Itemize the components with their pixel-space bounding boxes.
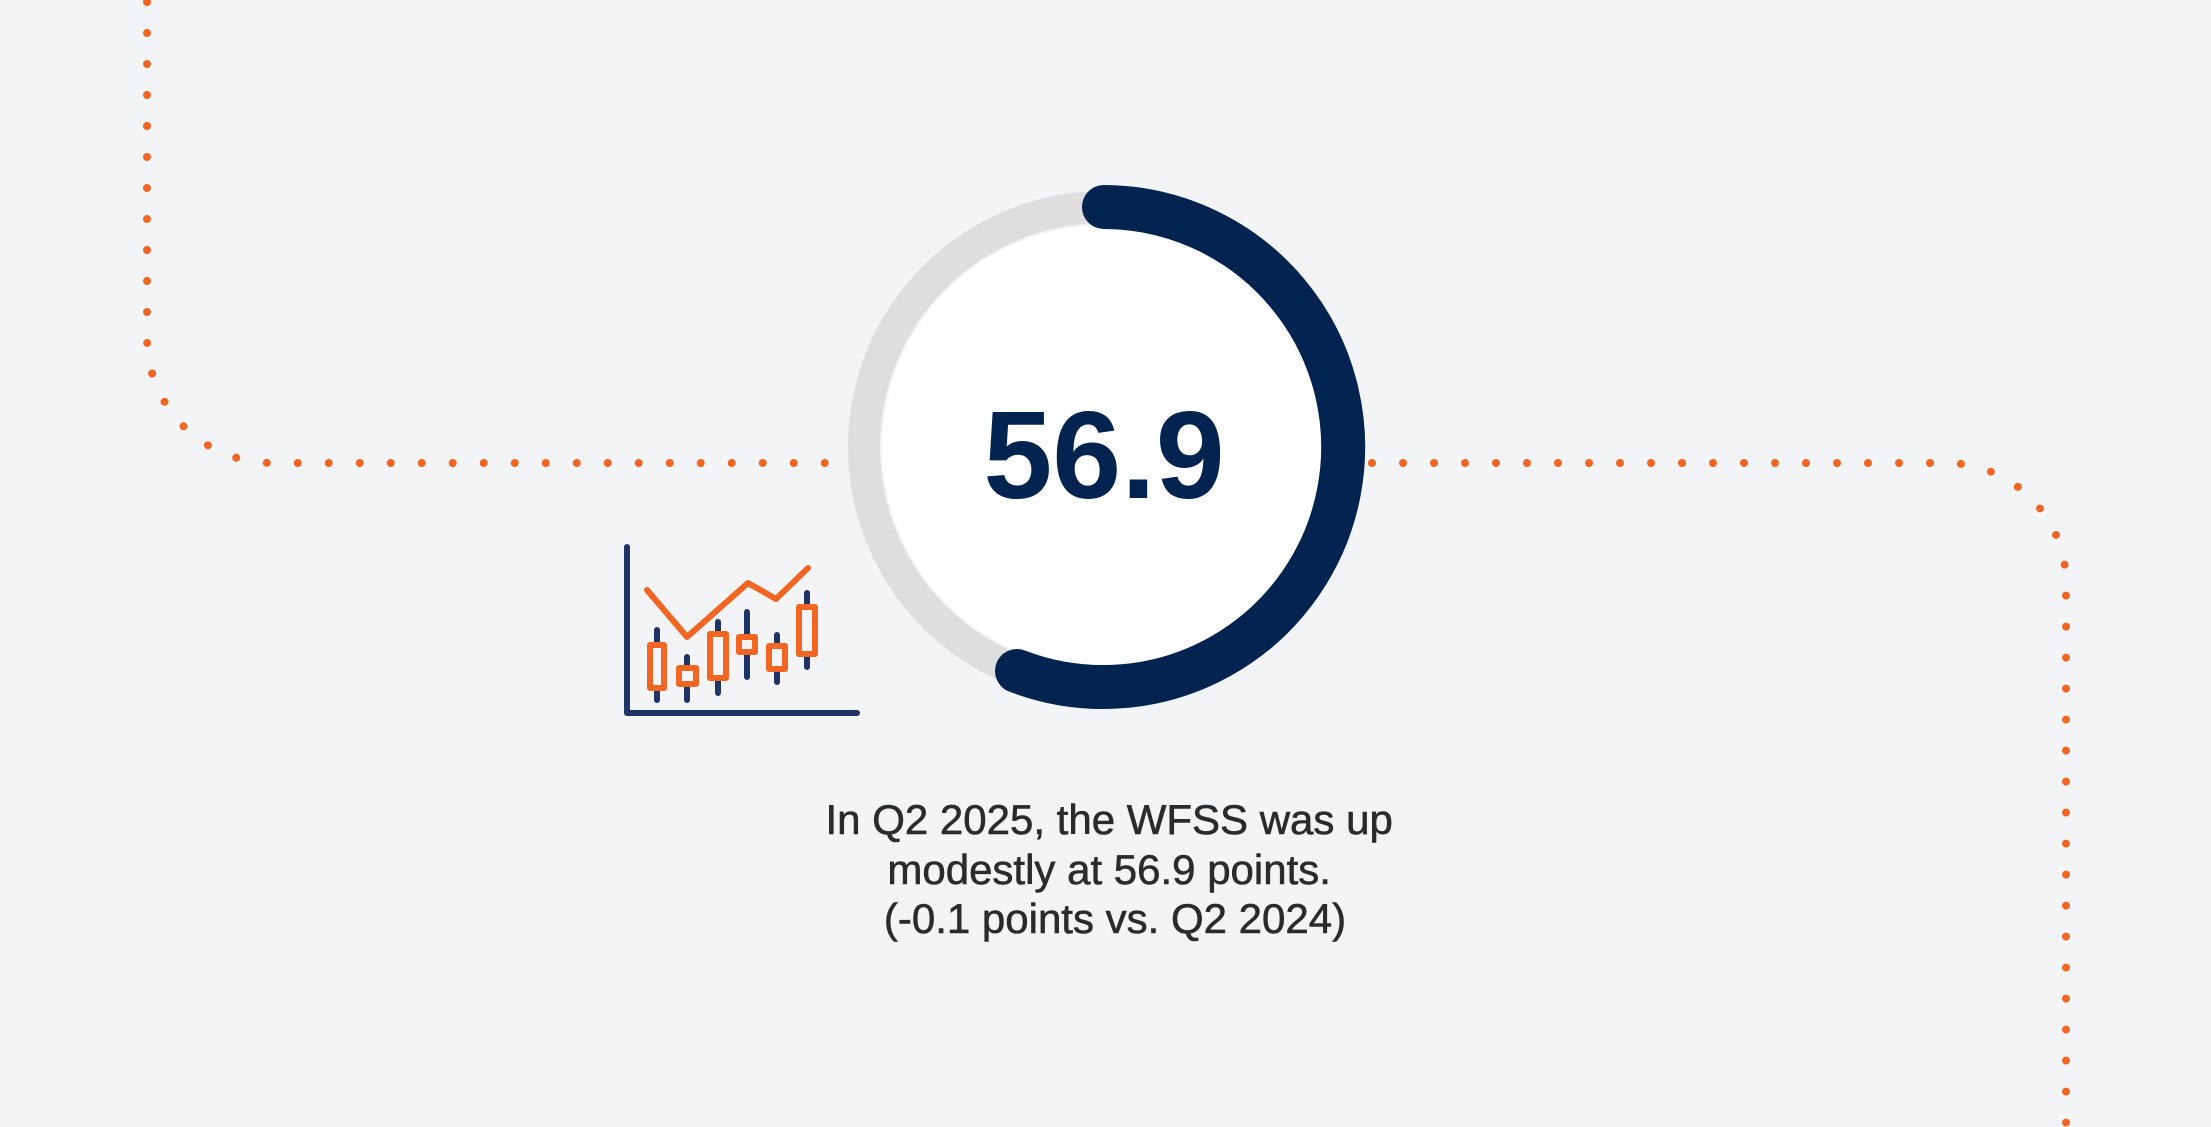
- caption text: In Q2 2025, the WFSS was up: [826, 796, 1393, 843]
- caption text: modestly at 56.9 points.: [887, 846, 1331, 893]
- caption text: (-0.1 points vs. Q2 2024): [884, 895, 1346, 942]
- dotted line right: [1372, 463, 2066, 1127]
- dotted line left: [147, 2, 845, 463]
- icon: candlestick chart: [627, 547, 857, 713]
- gauge: [864, 207, 1344, 687]
- gauge value: 56.9: [983, 387, 1225, 525]
